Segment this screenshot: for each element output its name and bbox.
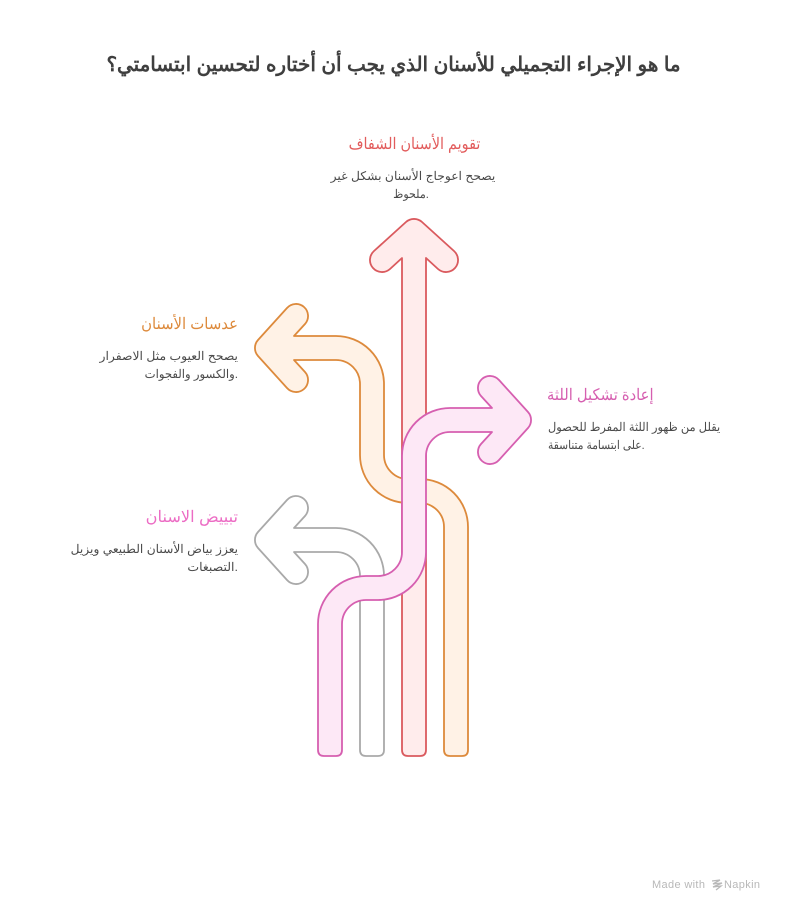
text block: clear aligners: تقويم الأسنان الشفاف (349, 136, 480, 153)
text block: veneers: عدسات الأسنان (141, 316, 238, 333)
text block: whitening: التصبغات. (187, 560, 238, 574)
text block: clear aligners (330, 134, 495, 201)
text block: veneers: يصحح العيوب مثل الاصفرار (99, 349, 238, 363)
footer: made with Napkin: Napkin (724, 879, 760, 891)
arrow: veneers (orange) (255, 304, 468, 756)
text block: gum reshaping: يقلل من ظهور اللثة المفرط للحصول (548, 420, 720, 434)
footer: made with Napkin: Made with (652, 879, 705, 891)
text block: gum reshaping: إعادة تشكيل اللثة (547, 387, 654, 404)
text block: gum reshaping (547, 387, 720, 452)
arrow: gum reshaping (pink) (318, 376, 531, 756)
text block: whitening (71, 509, 238, 574)
text block: whitening: يعزز بياض الأسنان الطبيعي ويزيل (71, 542, 238, 556)
text block: veneers (99, 314, 238, 381)
text block: clear aligners: يصحح اعوجاج الأسنان بشكل غير (331, 169, 495, 183)
title: ما هو الإجراء التجميلي للأسنان الذي يجب أن أختاره لتحسين ابتسامتي؟ (106, 54, 681, 76)
text block: whitening: تبييض الاسنان (146, 509, 238, 526)
arrow: whitening (gray) (255, 496, 384, 756)
text block: veneers: والكسور والفجوات. (145, 367, 238, 381)
icon: napkin logo (712, 879, 723, 890)
text block: clear aligners: ملحوظ. (393, 187, 429, 201)
footer: made with Napkin (652, 879, 760, 891)
arrow: clear aligners (red) (370, 219, 458, 756)
text block: gum reshaping: على ابتسامة متناسقة. (548, 438, 645, 452)
